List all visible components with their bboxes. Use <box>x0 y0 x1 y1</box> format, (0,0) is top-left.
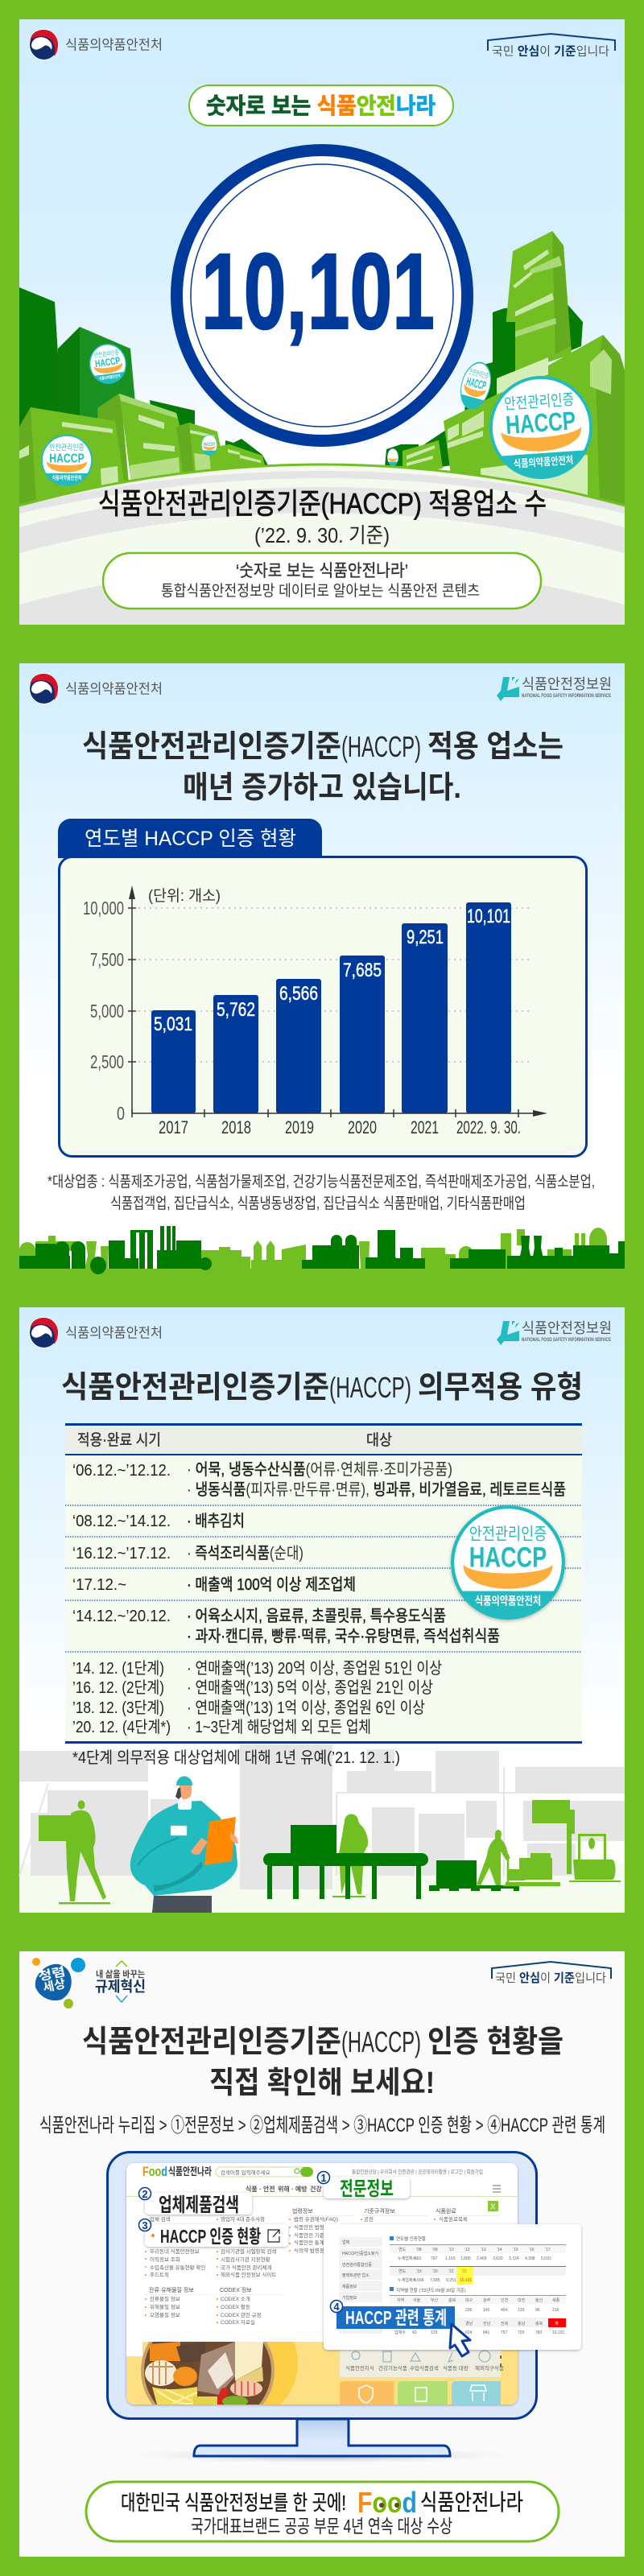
y axis labels <box>83 898 125 1124</box>
footer pill: food safety korea: 대한민국 식품안전정보를 한 곳에! <box>121 2491 346 2515</box>
popup statistics tables: 563 <box>415 2256 422 2261</box>
popup statistics tables: ’08 <box>416 2248 422 2252</box>
popup statistics tables: 729 <box>518 2330 525 2335</box>
logo: Ministry of Food and Drug Safety <box>29 673 163 704</box>
website logo <box>142 2164 212 2179</box>
popup statistics tables: 216 <box>552 2308 559 2313</box>
logo: clean world: 세상 <box>42 1977 67 1995</box>
callout 3: HACCP certification status: 3 <box>142 2219 148 2231</box>
panel: mandatory HACCP types table <box>19 1307 625 1913</box>
unit label: (단위: 개소) <box>148 887 221 905</box>
popup statistics tables: 4,398 <box>525 2256 535 2261</box>
popup statistics tables: 797 <box>431 2256 438 2261</box>
popup statistics tables: 6,566 <box>414 2278 424 2283</box>
popup statistics tables: 7,685 <box>430 2278 440 2283</box>
website menu lists: 기준규격정보 <box>364 2207 395 2215</box>
website shortcut icon row <box>340 2348 504 2377</box>
popup statistics tables: 10,101 <box>460 2278 473 2283</box>
illustration: warehouse background <box>19 1744 625 1913</box>
popup statistics tables: 연도 <box>398 2247 407 2252</box>
icon: mouse cursor <box>450 2324 470 2356</box>
footer pill: food safety korea <box>86 2482 559 2541</box>
HACCP badge on building, tiny right <box>387 448 398 466</box>
website shortcut icon row: 식품안전지식 <box>345 2364 374 2372</box>
popup statistics tables: ’10 <box>448 2248 454 2252</box>
callout 4: HACCP statistics <box>330 2301 455 2329</box>
HACCP badge on building, rear right: HACCP <box>465 374 488 393</box>
popup statistics tables: 경남 <box>465 2321 473 2326</box>
popup statistics tables: ’21 <box>448 2269 454 2274</box>
y axis labels: 2,500 <box>90 1051 124 1072</box>
heading pill: numbers food safety korea: 숫자로 보는 식품안전나라 <box>206 93 436 118</box>
logo: regulatory innovation: 내 삶을 바꾸는 <box>96 1968 145 1979</box>
heading: (HACCP) <box>341 730 421 763</box>
bar chart <box>83 886 547 1137</box>
popup statistics tables: 841 <box>483 2330 490 2335</box>
website menu lists: 법령 유권해석(FAQ) <box>294 2215 338 2223</box>
y axis labels: 5,000 <box>90 1001 124 1022</box>
big number circle: 10,101 <box>177 150 467 441</box>
website menu lists: 식품원료 <box>436 2207 456 2215</box>
logo: Ministry of Food and Drug Safety: 식품의약품안전처 <box>65 681 163 697</box>
monitor frame <box>108 2153 536 2418</box>
row: 2017: · 매출액 100억 이상 제조업체 <box>187 1575 356 1594</box>
callout 4: HACCP statistics: 4 <box>333 2301 340 2313</box>
website menu lists: 해외식품 안전정보 사이트 <box>221 2271 276 2278</box>
popup statistics tables: 42 <box>412 2330 417 2335</box>
website menu lists: 잔류·유해물질 정보 <box>149 2286 194 2293</box>
footer pill: food safety korea: 식품안전나라 <box>420 2490 523 2515</box>
rows: stepwise schedule: · 연매출액(’13) 1억 이상, 종업원 6인 이상 <box>187 1699 425 1717</box>
HACCP certification badge: HACCP <box>469 1542 547 1574</box>
row: 2006 to 2012: ‘06.12.~’12.12. <box>72 1462 171 1480</box>
y axis labels: 0 <box>117 1103 125 1124</box>
HACCP badge on building, small rear left: HACCP <box>94 354 121 369</box>
popup statistics tables: 전북 <box>501 2321 509 2326</box>
callout 2: business product search: 2 <box>142 2188 148 2200</box>
rows: stepwise schedule <box>72 1659 442 1736</box>
popup statistics tables: 1,800 <box>460 2256 471 2261</box>
y axis labels: 7,500 <box>90 949 124 970</box>
popup sidebar menu: 기업정보 <box>342 2295 357 2301</box>
popup statistics tables: 783 <box>535 2330 543 2335</box>
popup statistics tables: 3,724 <box>509 2256 519 2261</box>
illustration: forklift <box>532 1800 621 1882</box>
website shortcut icon row: 건강기능식품 <box>378 2364 407 2372</box>
row: 2017: ‘17.12.~ <box>72 1576 126 1594</box>
row: 2006 to 2012 <box>72 1460 566 1499</box>
HACCP badge on building, tiny left: HACCP <box>204 443 215 448</box>
popup statistics tables: 3,620 <box>493 2256 503 2261</box>
website main nav: 건강 · <box>310 2185 326 2193</box>
table header row: 대상 <box>366 1431 392 1449</box>
illustration: green factory buildings, right <box>385 231 625 509</box>
popup statistics tables: ’20 <box>432 2269 438 2274</box>
website logo: Food <box>142 2164 167 2179</box>
main heading: number of HACCP certified businesses: 식품안전관리인증기준(HACCP) 적용업소 수 <box>98 487 547 520</box>
HACCP badge on building, small rear left <box>87 341 129 386</box>
popup statistics tables: 지역 <box>397 2297 404 2303</box>
table header row: 적용·완료 시기 <box>77 1431 161 1449</box>
website menu lists: 우리동네 식품안전정보 <box>150 2248 200 2255</box>
x axis labels: 2017 <box>159 1117 188 1137</box>
heading pill: numbers food safety korea <box>189 85 453 126</box>
footer pill: food safety korea: 국가대표브랜드 공공 부문 4년 연속 대상 수상 <box>191 2516 452 2537</box>
website shortcut icon row: 수입식품검색 <box>410 2364 439 2372</box>
x axis labels: 2018 <box>221 1117 251 1137</box>
website menu lists: 업체 검색 <box>150 2215 171 2223</box>
website colored tiles <box>340 2381 501 2405</box>
callout 4: HACCP statistics: HACCP 관련 통계 <box>345 2307 447 2328</box>
statistics popup window <box>324 2224 581 2350</box>
website shortcut icon row: 식품등 대량 <box>443 2364 469 2372</box>
row: 2014 to 2020: · 어육소시지, 음료류, 초콜릿류, 특수용도식품 <box>187 1607 446 1625</box>
rows: stepwise schedule: ’20. 12. (4단계*) <box>72 1718 171 1736</box>
popup statistics tables: 광주 <box>483 2297 491 2303</box>
logo: Ministry of Food and Drug Safety: 식품의약품안전처 <box>65 1325 163 1341</box>
illustration: green factory buildings, left <box>19 287 269 507</box>
logo: National Food Safety Information Service <box>497 1320 612 1345</box>
popup statistics tables: 충북 <box>535 2321 543 2326</box>
chart card <box>58 819 586 1156</box>
website top nav: 통합민원상담 | 우리회사 인증관리 | 공공데이터활용 | 로그인 | 회원가입 <box>352 2168 483 2175</box>
HACCP badge on building, large right: 식품의약품안전처 <box>513 454 574 470</box>
popup statistics tables: 지역별 현황 (’22년도 09월 30일 기준) <box>396 2287 466 2293</box>
logo: Ministry of Food and Drug Safety: 식품의약품안전처 <box>65 37 163 53</box>
popup statistics tables: 연도 <box>398 2268 407 2274</box>
row: 2014 to 2020: · 과자·캔디류, 빵류·떡류, 국수·유탕면류, 즉석섭취식품 <box>187 1627 500 1645</box>
callout 1: expert information <box>317 2172 410 2200</box>
website menu lists: 식의약 법령정보실 <box>294 2247 334 2254</box>
logo: National Food Safety Information Service <box>497 676 612 701</box>
heading <box>82 2025 564 2100</box>
row: 2014 to 2020: ‘14.12.~’20.12. <box>72 1608 171 1625</box>
heading: 적용 업소는 <box>427 730 564 764</box>
website screen <box>126 2163 518 2431</box>
popup statistics tables: ’17 <box>545 2248 551 2252</box>
panel: how to check on the website <box>19 1951 625 2557</box>
website shortcut icon row: 해외직구식품 <box>475 2364 504 2372</box>
popup statistics tables: 부산 <box>431 2297 439 2303</box>
logo: clean world: 청렴 <box>37 1965 67 1984</box>
callout 1: expert information: 전문정보 <box>340 2178 394 2200</box>
HACCP badge on building, rear right <box>456 358 496 413</box>
website menu lists <box>145 2207 499 2326</box>
logo: National Food Safety Information Service: NATIONAL FOOD SAFETY INFORMATION SERVICE <box>522 694 611 699</box>
x axis labels: 2022. 9. 30. <box>456 1117 521 1137</box>
website menu lists: 공전 <box>364 2215 374 2223</box>
logo: National Food Safety Information Service: 식품안전정보원 <box>522 1320 612 1336</box>
popup statistics tables: 세종 <box>552 2297 560 2303</box>
heading <box>61 1371 583 1405</box>
website menu lists: 수입축산물 유통현황 확인 <box>150 2264 205 2271</box>
heading: 매년 증가하고 있습니다. <box>183 771 461 805</box>
popup statistics tables: 10,101 <box>552 2330 565 2335</box>
heading: 직접 확인해 보세요! <box>209 2066 435 2100</box>
logo: National Food Safety Information Service: NATIONAL FOOD SAFETY INFORMATION SERVICE <box>522 1338 611 1343</box>
popup statistics tables: ’13 <box>481 2248 486 2252</box>
x axis labels: 2021 <box>411 1117 439 1137</box>
row: 2006 to 2012: · 냉동식품(피자류·만두류·면류), 빙과류, 비가열음료, 레토르트식품 <box>187 1480 566 1499</box>
table: mandatory schedule <box>65 1423 582 1744</box>
rows: stepwise schedule: · 연매출액(’13) 20억 이상, 종업원 51인 이상 <box>187 1659 442 1678</box>
description pill: 통합식품안전정보망 데이터로 알아보는 식품안전 콘텐츠 <box>161 582 480 600</box>
slogan: public safety is the standard: 국민 안심이 기준입니다 <box>492 45 609 58</box>
website menu lists: 법령정보 <box>292 2207 313 2215</box>
popup statistics tables: 서울 <box>413 2297 421 2303</box>
website menu lists: 식품원료목록 <box>439 2215 468 2223</box>
website menu lists: CODEX 관련 규정 <box>221 2311 262 2318</box>
row: 2016 to 2017: · 즉석조리식품(순대) <box>187 1544 303 1563</box>
HACCP certification badge: 식품의약품안전처 <box>475 1596 541 1608</box>
popup statistics tables: 9,251 <box>446 2278 456 2283</box>
description pill: ‘숫자로 보는 식품안전나라’ <box>236 562 408 580</box>
logo: Food: Food <box>357 2486 417 2519</box>
rows: stepwise schedule: ’16. 12. (2단계) <box>72 1678 164 1697</box>
popup statistics tables: ’09 <box>432 2248 438 2252</box>
popup statistics tables: 누계업체수 <box>398 2277 416 2283</box>
illustration: factory skyline <box>19 1226 625 1274</box>
row: 2008 to 2014: ‘08.12.~’14.12. <box>72 1513 171 1530</box>
popup sidebar menu: HACCP인증업소찾기 <box>342 2251 378 2256</box>
popup statistics tables: ’16 <box>529 2248 535 2252</box>
website menu lists: 푸드트윅 <box>150 2271 169 2278</box>
popup statistics tables: 145 <box>483 2308 490 2313</box>
popup statistics tables: 계 <box>555 2321 559 2326</box>
popup statistics tables: 1,163 <box>445 2256 456 2261</box>
HACCP badge on building, left: 안전관리인증 <box>49 444 85 452</box>
website screen: X <box>490 2202 496 2212</box>
website search bar <box>216 2167 313 2177</box>
HACCP badge on building, left <box>41 435 93 486</box>
HACCP badge on building, large right: HACCP <box>505 406 576 440</box>
website menu lists: CODEX 자료실 <box>221 2318 255 2326</box>
website menu lists: CODEX 정보 <box>220 2286 252 2293</box>
bar values <box>154 906 510 1035</box>
website main nav: 위해 · 예방 <box>278 2185 308 2193</box>
callout 2: business product search: 업체제품검색 <box>159 2194 239 2216</box>
popup statistics tables: 96 <box>535 2308 540 2313</box>
popup statistics tables: 전남 <box>483 2321 491 2326</box>
panel: yearly HACCP growth chart <box>19 663 625 1274</box>
bar values: 6,566 <box>279 983 318 1005</box>
monitor stand and shadow <box>113 2419 531 2464</box>
road in perspective <box>19 464 625 625</box>
HACCP badge on building, large right <box>486 373 596 482</box>
card tab: HACCP certification by year <box>58 819 322 858</box>
x axis labels: 2020 <box>348 1117 377 1137</box>
monitor illustration <box>108 2153 581 2464</box>
website search bar: 검색어를 입력해주세요 <box>221 2169 270 2176</box>
HACCP badge on building, tiny left <box>201 435 217 456</box>
popup statistics tables: 연도별 인증현황 <box>396 2235 426 2242</box>
popup statistics tables: 대구 <box>465 2297 473 2303</box>
logo: regulatory innovation <box>95 1961 146 2002</box>
website menu lists: 시험검사기관 지정현황 <box>221 2256 270 2263</box>
popup statistics tables: 누계업체수 <box>398 2256 416 2261</box>
panel: HACCP count cover <box>19 19 625 625</box>
popup statistics tables: ’14 <box>497 2248 502 2252</box>
popup statistics tables: ’15 <box>513 2248 518 2252</box>
HACCP badge on building, large right: 안전관리인증 <box>504 390 575 413</box>
bar values: 5,762 <box>217 999 255 1021</box>
row: 2006 to 2012: · 어묵, 냉동수산식품(어류·연체류·조미가공품) <box>187 1460 452 1479</box>
popup statistics tables: 대전 <box>518 2297 526 2303</box>
logo: clean world <box>32 1958 85 2008</box>
popup sidebar menu: 제품정보 <box>342 2284 357 2289</box>
popup statistics tables: ’22 <box>461 2269 467 2274</box>
heading <box>82 730 564 805</box>
popup statistics tables: 5,031 <box>541 2256 551 2261</box>
row: 2008 to 2014: · 배추김치 <box>187 1512 245 1530</box>
callout 1: expert information: 1 <box>320 2172 327 2184</box>
bar values: 9,251 <box>407 927 444 948</box>
popup statistics tables: ’19 <box>416 2269 422 2274</box>
website menu lists: 식품안전 기준규격 <box>294 2231 334 2239</box>
popup sidebar menu <box>339 2237 382 2334</box>
footnote: target industries <box>47 1173 595 1212</box>
popup statistics tables: 충남 <box>518 2321 526 2326</box>
callout 2: business product search <box>138 2188 252 2216</box>
rows: stepwise schedule: · 연매출액(’13) 5억 이상, 종업원 21인 이상 <box>187 1678 433 1697</box>
slogan: public safety is the standard: 국민 안심이 기준입니다 <box>495 1971 606 1985</box>
row: 2017 <box>72 1575 356 1594</box>
row: 2014 to 2020 <box>72 1607 500 1645</box>
description pill <box>103 553 541 609</box>
callout 3: HACCP certification status: HACCP 인증 현황 <box>160 2226 261 2247</box>
website menu lists: 위해물질 정보 <box>150 2303 180 2310</box>
logo: Ministry of Food and Drug Safety <box>29 29 163 60</box>
popup statistics tables: 업체수 <box>394 2330 406 2335</box>
HACCP badge on building, small rear left: 식품의약품안전처 <box>99 373 121 382</box>
heading: (HACCP) <box>329 1371 411 1404</box>
heading: (HACCP) <box>341 2025 421 2058</box>
bar values: 7,685 <box>343 960 382 981</box>
slogan: public safety is the standard <box>488 34 615 58</box>
logo: clean world and regulatory innovation <box>32 1958 146 2008</box>
table header row <box>65 1423 582 1455</box>
heading: 식품안전관리인증기준 <box>82 730 341 764</box>
website logo: 식품안전나라 <box>168 2165 212 2178</box>
heading: 식품안전관리인증기준 <box>82 2025 341 2059</box>
rows: stepwise schedule: · 1~3단계 해당업체 외 모든 업체 <box>187 1718 371 1736</box>
heading: 의무적용 유형 <box>418 1371 583 1405</box>
popup statistics tables: 인천 <box>501 2297 509 2303</box>
card tab: HACCP certification by year: 연도별 HACCP 인증 현황 <box>85 828 296 850</box>
row: 2016 to 2017: ‘16.12.~’17.12. <box>72 1545 171 1563</box>
website menu lists: 검사기관별 시험항목 검색 <box>221 2248 276 2255</box>
illustration: inspector with clipboard <box>130 1776 238 1913</box>
footnote: grace period: *4단계 의무적용 대상업체에 대해 1년 유예(’21. 12. 1.) <box>72 1748 400 1767</box>
reference date: (’22. 9. 30. 기준) <box>254 523 390 547</box>
heading: 인증 현황을 <box>427 2025 564 2059</box>
website menu lists: CODEX 소개 <box>221 2295 250 2302</box>
popup statistics tables: ’12 <box>464 2248 470 2252</box>
website menu lists: 식품안전 통계 정보 <box>294 2239 335 2246</box>
rows: stepwise schedule: ’18. 12. (3단계) <box>72 1699 164 1717</box>
website menu lists: 이력정보 조회 <box>150 2256 180 2263</box>
row: 2016 to 2017 <box>72 1544 303 1563</box>
bars <box>151 902 511 1113</box>
popup sidebar menu: 팔레트관련 업소 <box>342 2273 369 2278</box>
popup statistics tables: 133 <box>518 2308 525 2313</box>
popup statistics tables: 235 <box>465 2308 473 2313</box>
website main nav: 식품 · 안전 <box>246 2185 275 2193</box>
y axis labels: 10,000 <box>83 898 124 919</box>
website hero image: food in a pot <box>126 2342 518 2405</box>
website menu lists: 국가 식품안전 관리체계 <box>221 2264 271 2271</box>
website main nav <box>246 2185 501 2193</box>
bar values: 5,031 <box>154 1013 192 1035</box>
HACCP certification badge <box>451 1505 565 1620</box>
HACCP badge on building, rear right: 안전관리인증 <box>469 366 490 381</box>
website menu lists: 영업자 4대 준수사항 <box>221 2215 265 2223</box>
HACCP badge on building, left: 식품의약품안전처 <box>52 474 82 481</box>
popup statistics tables: 757 <box>501 2330 508 2335</box>
heading: 식품안전관리인증기준 <box>61 1371 329 1405</box>
website menu lists: 식품안전 법령 정보 <box>294 2223 335 2231</box>
logo: regulatory innovation: 규제혁신 <box>95 1979 146 1995</box>
website menu lists: CODEX 활동 <box>221 2303 250 2310</box>
footnote: target industries: 식품접객업, 집단급식소, 식품냉동냉장업, 집단급식소 식품판매업, 기타식품판매업 <box>110 1195 526 1212</box>
illustration: pallet and hand truck worker <box>429 1830 560 1891</box>
popup sidebar menu: 업체 <box>342 2240 350 2245</box>
HACCP certification badge: 안전관리인증 <box>469 1525 547 1544</box>
popup statistics tables: 454 <box>501 2308 508 2313</box>
bar values: 10,101 <box>467 906 510 927</box>
axes <box>128 886 547 1117</box>
logo: Ministry of Food and Drug Safety <box>29 1317 163 1348</box>
website menu lists: 잔류물질 정보 <box>150 2295 180 2302</box>
logo: National Food Safety Information Service: 식품안전정보원 <box>522 676 612 692</box>
popup statistics tables: 울산 <box>535 2297 543 2303</box>
website menu lists: 오염물질 정보 <box>150 2311 180 2318</box>
big number circle: 10,101: 10,101 <box>201 232 435 352</box>
popup statistics tables <box>390 2235 566 2335</box>
popup statistics tables: 충북 <box>448 2297 456 2303</box>
callout 3: HACCP certification status <box>138 2219 288 2247</box>
row: 2008 to 2014 <box>72 1512 245 1530</box>
popup statistics tables: 2,469 <box>477 2256 487 2261</box>
x axis labels <box>159 1117 521 1137</box>
popup statistics tables: 129 <box>431 2330 438 2335</box>
illustration: worker carrying box <box>39 1800 110 1905</box>
slogan: public safety is the standard <box>492 1962 611 1985</box>
illustration: conveyor belt with worker <box>263 1814 428 1899</box>
x axis labels: 2019 <box>285 1117 314 1137</box>
HACCP badge on building, small rear left: 안전관리인증 <box>93 349 120 359</box>
popup statistics tables: 624 <box>465 2330 473 2335</box>
popup sidebar menu: 안전관리통합인증 <box>342 2262 372 2268</box>
rows: stepwise schedule: ’14. 12. (1단계) <box>72 1659 164 1678</box>
HACCP badge on building, left: HACCP <box>49 452 85 466</box>
